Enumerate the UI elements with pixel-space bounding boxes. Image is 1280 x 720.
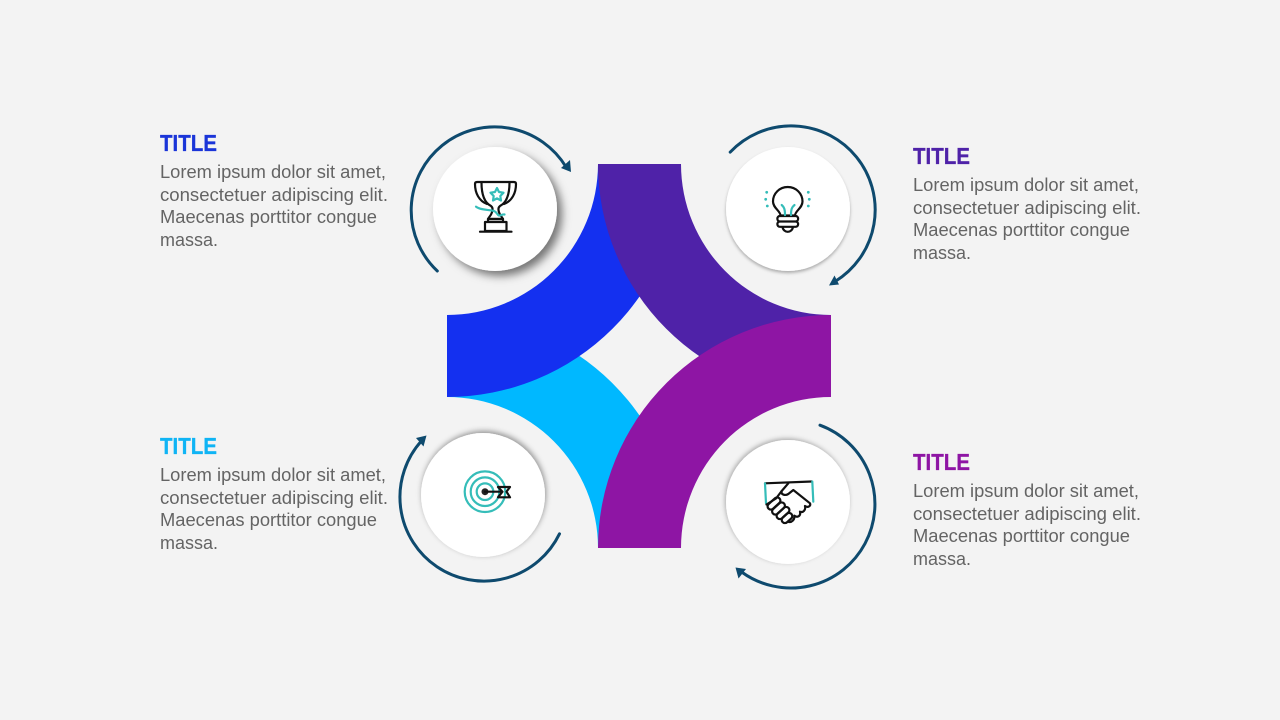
arc segment: cyan (447, 315, 681, 548)
text block: bottom right: consectetuer adipiscing elit. (913, 504, 1141, 524)
text block: top right: consectetuer adipiscing elit. (913, 198, 1141, 218)
heading: top right: TITLE (913, 143, 970, 169)
heading: bottom left: TITLE (160, 433, 217, 459)
arc segment: magenta (598, 315, 831, 548)
text block: bottom right (913, 449, 1141, 569)
text block: bottom left: consectetuer adipiscing elit. (160, 488, 388, 508)
circular arrow: bottom right (736, 425, 875, 588)
icon badge: handshake (726, 440, 850, 564)
circular arrow: top right (730, 126, 875, 286)
icon badge: trophy (433, 147, 557, 271)
icon: light bulb (764, 187, 811, 232)
text block: top right: Maecenas porttitor congue (913, 220, 1130, 240)
text block: bottom right: Maecenas porttitor congue (913, 526, 1130, 546)
icon: trophy (475, 182, 516, 232)
icon: handshake (765, 482, 813, 524)
text block: top left: massa. (160, 230, 218, 250)
text block: bottom left: massa. (160, 533, 218, 553)
text block: top left: consectetuer adipiscing elit. (160, 185, 388, 205)
text block: top right: massa. (913, 243, 971, 263)
arc segment: blue (447, 164, 681, 397)
text block: bottom right: Lorem ipsum dolor sit amet, (913, 481, 1139, 501)
arc segment: indigo (598, 164, 831, 397)
circular arrow: top left (411, 127, 571, 271)
text block: top left (160, 130, 388, 250)
text block: bottom left (160, 433, 388, 553)
circular arrow: bottom left (400, 436, 560, 581)
heading: top left: TITLE (160, 130, 217, 156)
text block: bottom right: massa. (913, 549, 971, 569)
text block: top right: Lorem ipsum dolor sit amet, (913, 175, 1139, 195)
text block: bottom left: Lorem ipsum dolor sit amet, (160, 465, 386, 485)
icon: target with dart (465, 471, 510, 512)
heading: bottom right: TITLE (913, 449, 970, 475)
icon badge: light bulb (726, 147, 850, 271)
text block: top left: Lorem ipsum dolor sit amet, (160, 162, 386, 182)
text block: top left: Maecenas porttitor congue (160, 207, 377, 227)
text block: top right (913, 143, 1141, 263)
quartered-arc diagram (447, 164, 831, 548)
icon badge: target (421, 433, 545, 557)
text block: bottom left: Maecenas porttitor congue (160, 510, 377, 530)
